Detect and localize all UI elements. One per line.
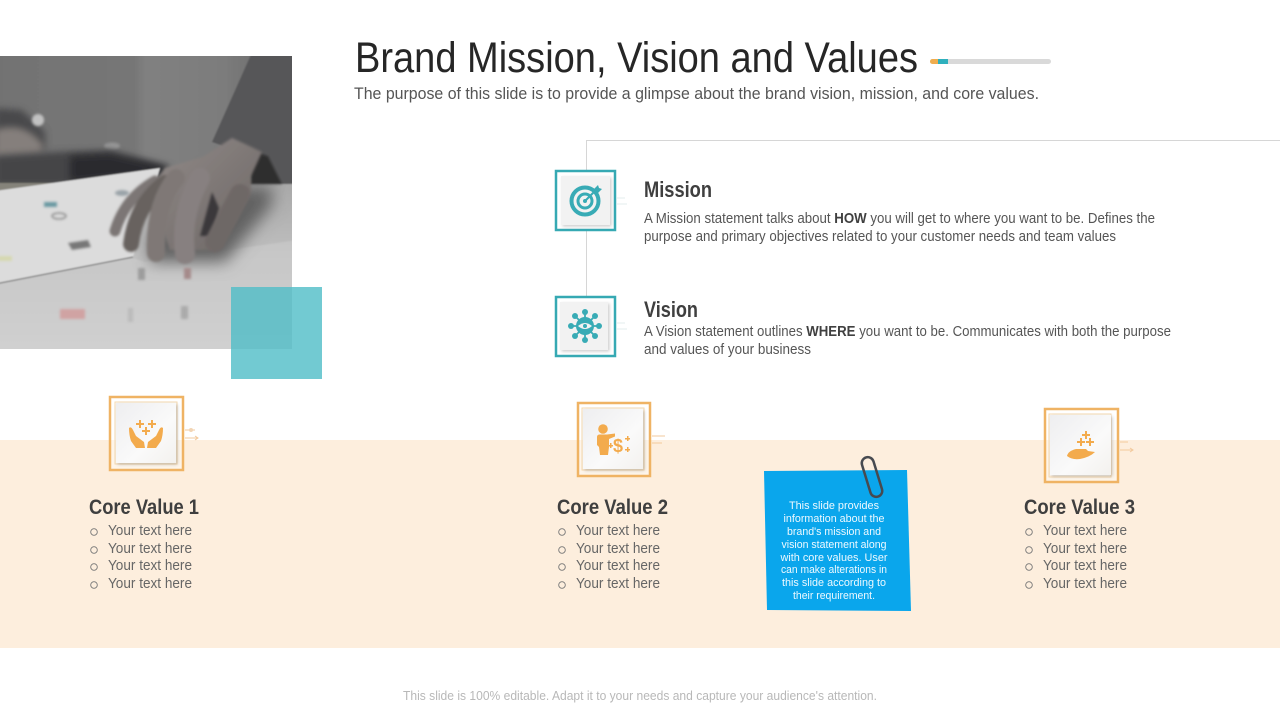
note text: vision statement along [782, 539, 886, 551]
background band [0, 440, 1280, 648]
core value 2 [557, 403, 668, 592]
core value 3 [1024, 409, 1135, 592]
note text: their requirement. [793, 590, 875, 602]
list: Your text here [1043, 540, 1127, 557]
list [1026, 522, 1127, 592]
list: Your text here [576, 522, 660, 539]
icon: person with dollar: $ [613, 436, 623, 456]
vision block [556, 297, 1171, 358]
list: Your text here [1043, 575, 1127, 592]
title progress bar [930, 59, 1051, 64]
note text: information about the [784, 513, 884, 525]
heading: vision: Vision [644, 297, 698, 322]
title: Brand Mission, Vision and Values [355, 34, 918, 82]
list: Your text here [1043, 557, 1127, 574]
icon: hand with sparkles [1045, 409, 1133, 482]
note text: brand's mission and [787, 526, 881, 538]
photo: hand on printed papers [0, 50, 297, 355]
heading: mission: Mission [644, 177, 712, 202]
list: Your text here [1043, 522, 1127, 539]
list [559, 522, 660, 592]
icon: eye network [556, 297, 627, 356]
shadow under hand [150, 186, 272, 262]
list: Your text here [108, 540, 192, 557]
list: Your text here [576, 575, 660, 592]
note text: this slide according to [782, 577, 886, 589]
teal accent square [231, 287, 322, 379]
heading: core value 1: Core Value 1 [89, 496, 199, 519]
note text: with core values. User [780, 552, 888, 564]
mission text: purpose and primary objectives related to your customer needs and team values [644, 228, 1116, 245]
icon: target [556, 171, 627, 230]
list: Your text here [576, 540, 660, 557]
icon: person with dollar [578, 403, 665, 476]
hand back [150, 138, 262, 250]
list: Your text here [108, 575, 192, 592]
mission text: A Mission statement talks about HOW you will get to where you want to be. Defines the [644, 210, 1155, 227]
note text [780, 500, 888, 602]
core value 1 [89, 397, 199, 592]
list: Your text here [576, 557, 660, 574]
mission text [644, 210, 1155, 245]
heading: core value 2: Core Value 2 [557, 496, 668, 519]
list: Your text here [108, 522, 192, 539]
icon: hands with sparkles [110, 397, 198, 470]
footer note: This slide is 100% editable. Adapt it to your needs and capture your audience's attention. [403, 688, 877, 703]
vision text [644, 323, 1171, 358]
heading: core value 3: Core Value 3 [1024, 496, 1135, 519]
subtitle: The purpose of this slide is to provide a glimpse about the brand vision, mission, and core values. [354, 84, 1039, 103]
vision text: A Vision statement outlines WHERE you want to be. Communicates with both the purpose [644, 323, 1171, 340]
sticky note [764, 456, 911, 611]
vision text: and values of your business [644, 341, 811, 358]
connector lines [586, 140, 1280, 357]
paper marks [0, 190, 191, 322]
list [91, 522, 192, 592]
sleeve [212, 50, 297, 184]
mission block [556, 171, 1155, 245]
list: Your text here [108, 557, 192, 574]
icon: paperclip [860, 456, 884, 498]
note text: This slide provides [789, 500, 879, 512]
note text: can make alterations in [781, 564, 887, 576]
